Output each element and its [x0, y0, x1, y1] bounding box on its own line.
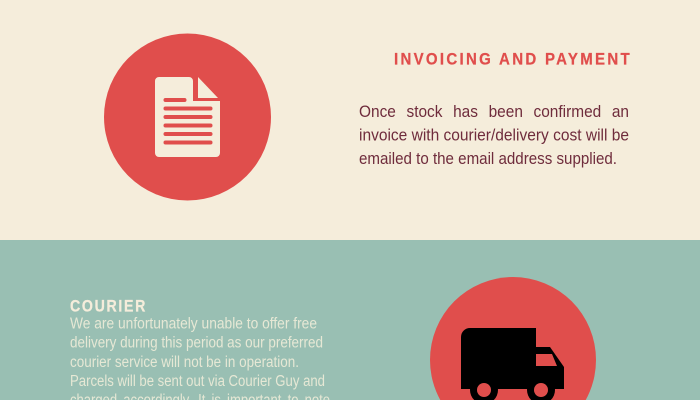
icon: delivery truck in red circle: [430, 277, 596, 400]
text block: courier description: courier service will not be in operation.: [70, 354, 299, 371]
text block: invoicing description: [359, 102, 629, 168]
text block: courier description: We are unfortunately unable to offer free: [70, 316, 317, 332]
text block: courier description: delivery during this period as our preferred: [70, 334, 323, 352]
text block: invoicing description: invoice with courier/delivery cost will be: [359, 126, 629, 144]
panel: courier: [0, 240, 700, 400]
text block: invoicing description: emailed to the email address supplied.: [359, 149, 617, 168]
text block: invoicing description: Once stock has been confirmed an: [359, 102, 629, 121]
text block: courier description: Parcels will be sent out via Courier Guy and: [70, 373, 325, 390]
panel: invoicing and payment: [0, 0, 700, 240]
icon: document in red circle: [104, 34, 271, 200]
heading: courier: COURIER: [70, 296, 147, 316]
text block: courier description: [70, 316, 330, 400]
heading: invoicing and payment: INVOICING AND PAYMENT: [394, 50, 632, 68]
